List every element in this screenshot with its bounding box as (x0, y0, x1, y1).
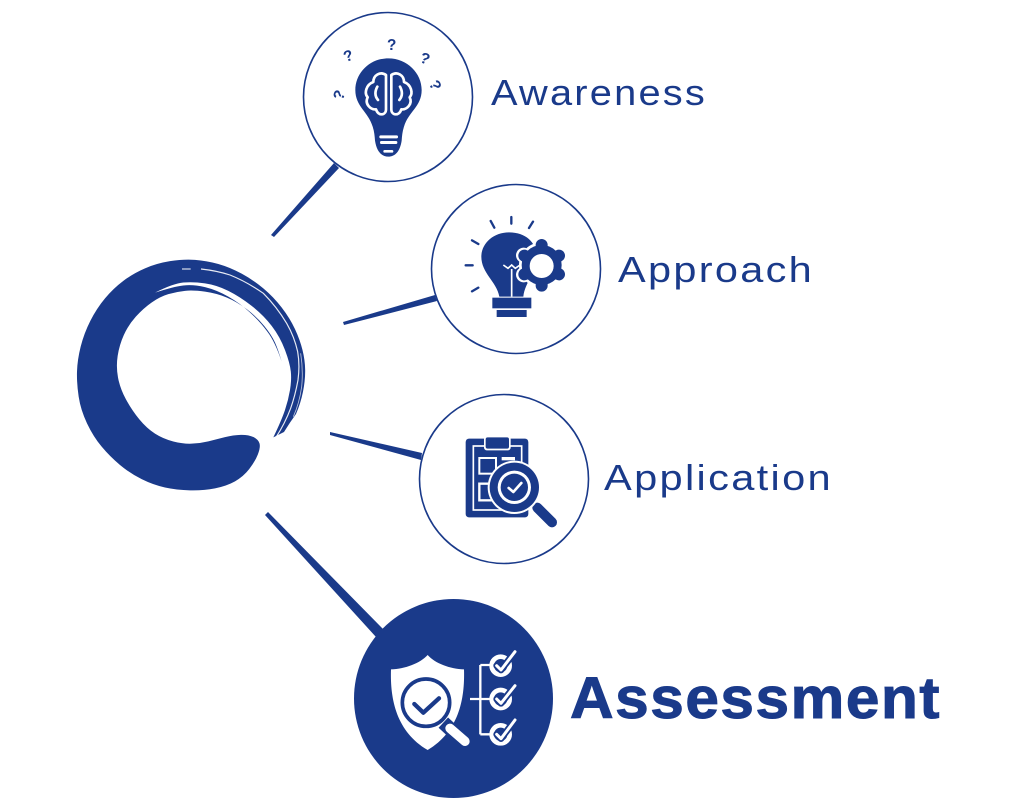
approach circle (432, 184, 600, 354)
icon: bulb with brain (330, 37, 444, 157)
assessment circle (354, 599, 553, 798)
assessment label: Assessment (570, 666, 941, 731)
node: assessment (354, 599, 941, 798)
awareness circle (304, 12, 472, 182)
icon: bulb with gear (466, 217, 564, 317)
connector: application (330, 432, 422, 460)
connector: assessment (265, 512, 384, 637)
icon: clipboard with magnifier (466, 436, 552, 522)
enso brush circle (77, 260, 305, 490)
question marks: ? (341, 47, 356, 66)
gear (519, 242, 564, 288)
approach label: Approach (618, 249, 814, 290)
node: awareness (304, 12, 707, 182)
application circle (420, 394, 588, 564)
question marks: ? (387, 37, 396, 54)
connector: awareness (271, 163, 339, 237)
icon: shield with magnifier and checklist (391, 652, 515, 750)
question marks: ? (330, 88, 349, 102)
awareness label: Awareness (491, 72, 707, 113)
question marks (330, 37, 444, 102)
node: approach (432, 184, 814, 354)
node: application (420, 394, 833, 564)
question marks: ? (418, 50, 432, 69)
question marks: ? (425, 78, 444, 93)
application label: Application (604, 457, 833, 498)
checklist marks (492, 652, 515, 743)
connector: approach (343, 295, 437, 325)
